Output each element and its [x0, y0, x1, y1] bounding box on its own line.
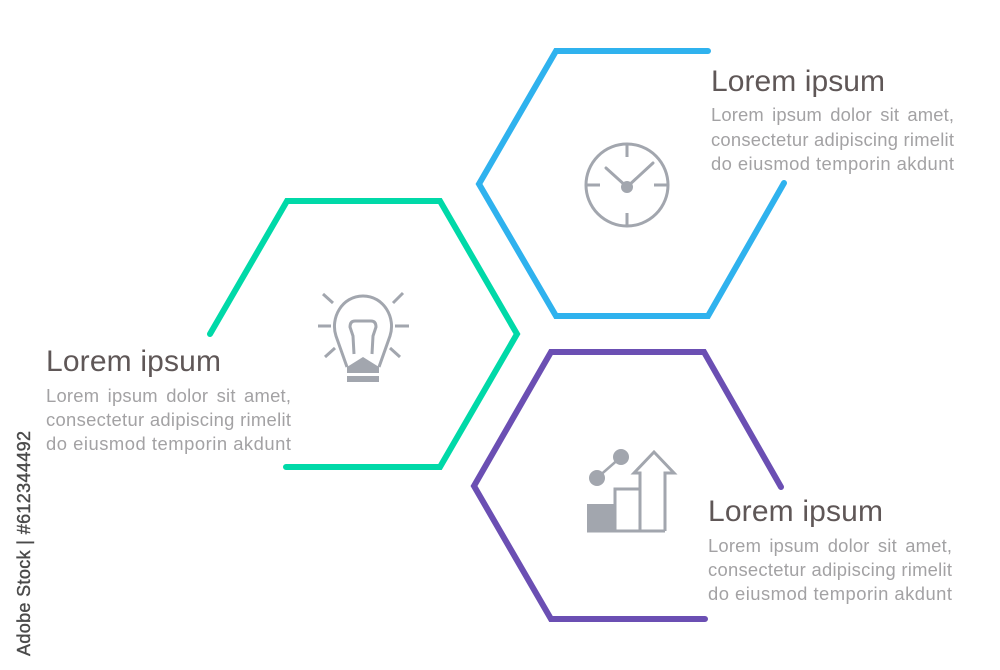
text block: left: consectetur adipiscing rimelit — [46, 409, 291, 430]
text block: left: Lorem ipsum dolor sit amet, — [46, 385, 291, 406]
text block: left: do eiusmod temporin akdunt — [46, 433, 291, 454]
text block: bottom right: consectetur adipiscing rimelit — [708, 559, 952, 580]
text block: top right — [711, 65, 954, 174]
text block: top right: Lorem ipsum dolor sit amet, — [711, 104, 954, 125]
text block: bottom right: Lorem ipsum dolor sit amet, — [708, 535, 952, 556]
hexagon outline: green — [210, 201, 517, 467]
text block: left — [46, 345, 291, 454]
icon: clock — [586, 144, 668, 226]
stock credit: Adobe Stock | #612344492 — [14, 431, 34, 656]
hexagon outline: blue — [479, 51, 784, 316]
text block: bottom right: do eiusmod temporin akdunt — [708, 583, 952, 604]
hexagon outline: purple — [474, 352, 781, 619]
text block: bottom right — [708, 495, 952, 604]
icon: light bulb — [318, 293, 409, 382]
text block: bottom right: Lorem ipsum — [708, 495, 883, 528]
text block: left: Lorem ipsum — [46, 345, 221, 378]
text block: top right: Lorem ipsum — [711, 65, 885, 98]
icon: growth chart — [587, 449, 674, 532]
text block: top right: consectetur adipiscing rimelit — [711, 129, 954, 150]
text block: top right: do eiusmod temporin akdunt — [711, 153, 954, 174]
